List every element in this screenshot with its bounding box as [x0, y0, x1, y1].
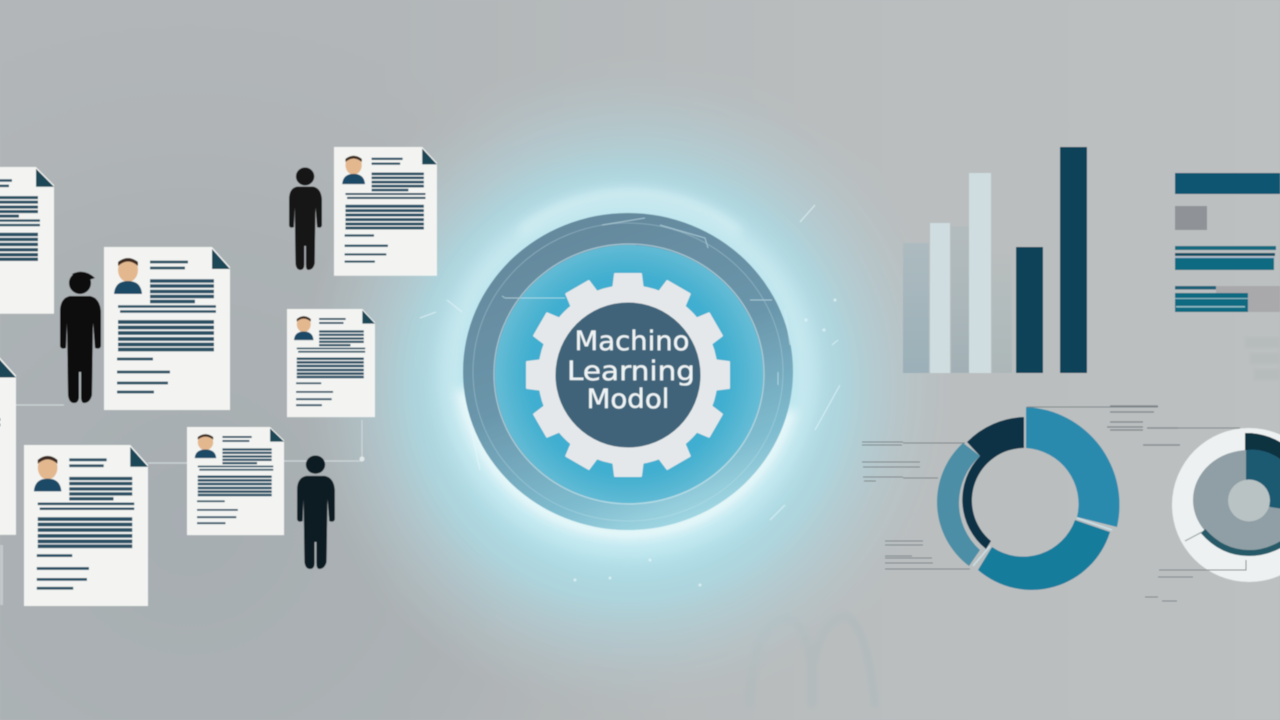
donut chart: main: [937, 407, 1120, 590]
resume document: small middle: [287, 309, 375, 417]
background: [0, 146, 1280, 720]
sparkles: [420, 205, 840, 586]
connector lines: [16, 405, 364, 463]
icon: person bottom: [297, 455, 335, 569]
bottom-left document sliver: [0, 545, 3, 605]
resume document: large upper: [104, 247, 230, 410]
resume document: small lower: [187, 427, 284, 535]
panel: model core: [463, 213, 793, 530]
faint panel caption: [1245, 337, 1280, 380]
ring detail lines: [473, 218, 790, 521]
resume document: large lower: [24, 445, 148, 606]
resume document: left edge: [0, 353, 16, 535]
icon: person top: [289, 167, 322, 270]
model label: Modol: [586, 384, 670, 415]
icon: gear: [527, 274, 729, 476]
gear hub: [556, 302, 700, 448]
icon: person left: [60, 272, 101, 403]
faint arch watermark: [749, 616, 875, 708]
bar chart: [903, 147, 1087, 373]
model label: Learning: [567, 356, 695, 387]
panel: summary bars: [1175, 173, 1280, 312]
inner cyan disc: [495, 245, 763, 503]
outer ring: [463, 213, 793, 530]
resume document: top right: [334, 147, 437, 276]
chart callout labels: [862, 406, 1246, 601]
model label: Machino: [574, 326, 690, 357]
donut chart: secondary: [1172, 428, 1280, 582]
resume document: far left top: [0, 167, 54, 314]
model label: [568, 328, 694, 410]
central glow: [335, 100, 904, 672]
